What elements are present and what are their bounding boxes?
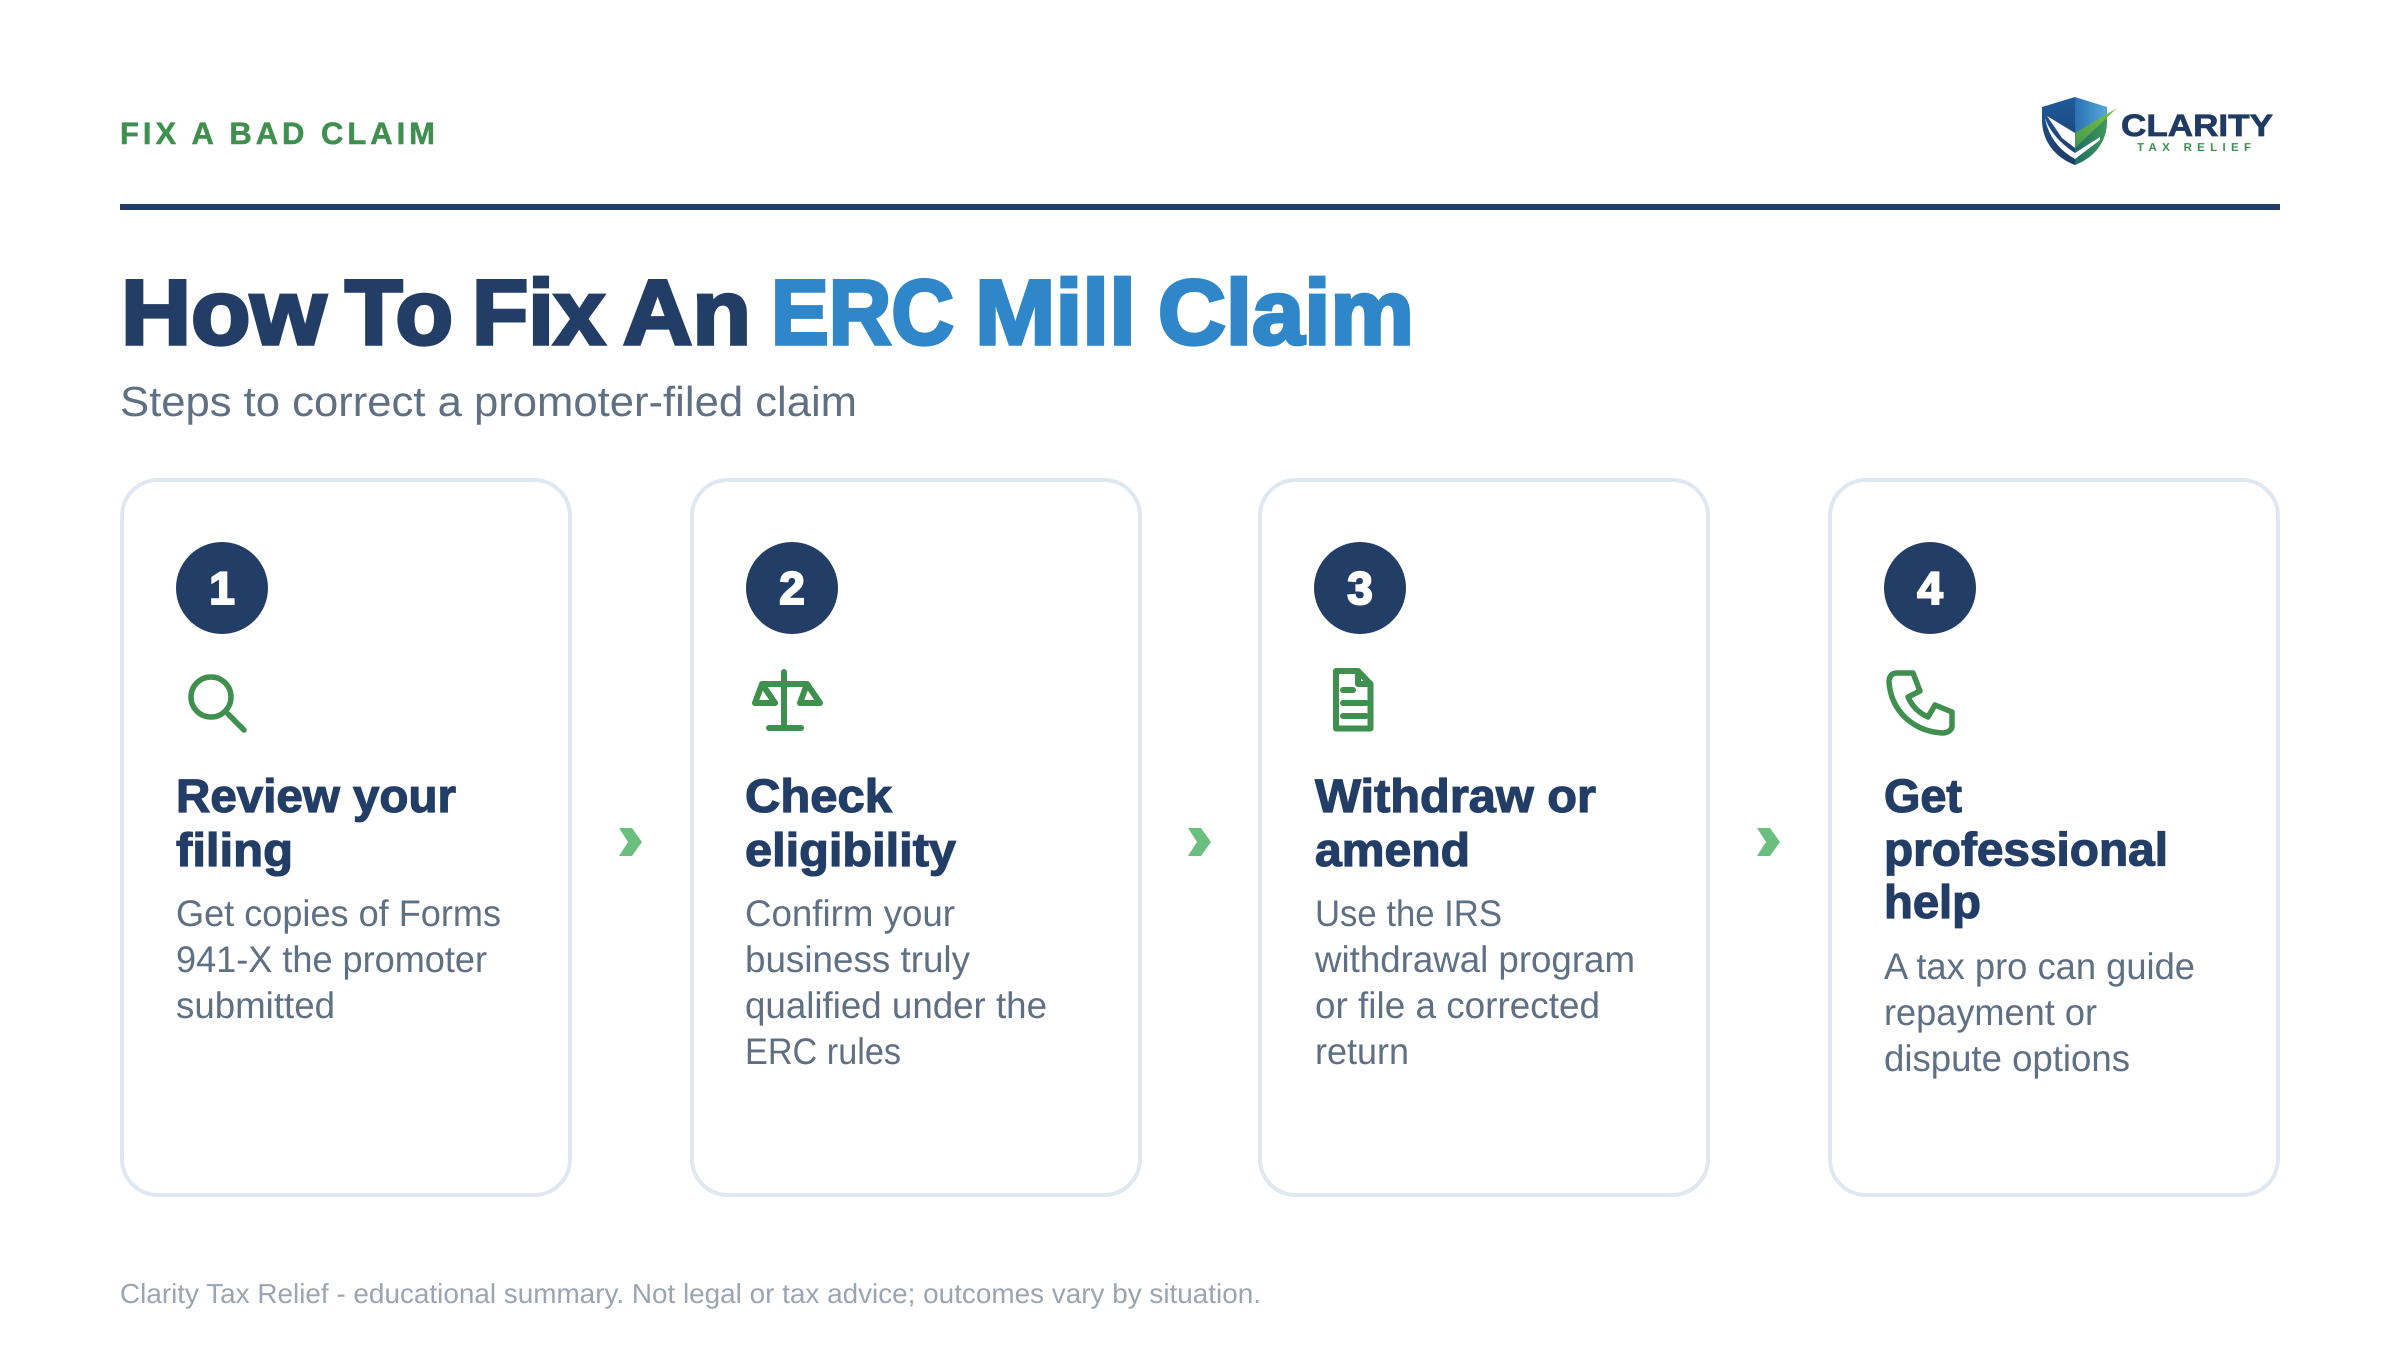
panel: step 4 (1830, 480, 2278, 1195)
step 4 text: A tax pro can guide (1884, 946, 2195, 987)
title: Fix (472, 262, 605, 364)
step number 4 (1884, 542, 1976, 634)
title: To (345, 262, 453, 364)
step 3 text: or file a corrected (1315, 985, 1600, 1026)
step 2 heading: Check (745, 769, 893, 822)
icon: magnifying glass (191, 677, 244, 730)
header rule (120, 204, 2280, 210)
step 2 text: qualified under the (745, 985, 1047, 1026)
step 3 heading: Withdraw or (1315, 769, 1596, 822)
step 3 text: return (1315, 1031, 1409, 1072)
panel: step 1 (122, 480, 570, 1195)
step number 3 (1314, 542, 1406, 634)
step 4 heading: professional (1884, 822, 2168, 876)
step number 2 (746, 542, 838, 634)
step 1 heading: Review your (176, 769, 456, 822)
step 2 text: business truly (745, 939, 970, 980)
step 2 text: ERC rules (745, 1031, 901, 1072)
footer note: Clarity Tax Relief - educational summary. Not legal or tax advice; outcomes vary by situation. (120, 1278, 1261, 1309)
icon: phone (1889, 673, 1952, 733)
step 4 text: dispute options (1884, 1038, 2130, 1079)
step 2 text: Confirm your (745, 893, 955, 934)
step 1 text: Get copies of Forms (176, 893, 501, 934)
subtitle: Steps to correct a promoter-filed claim (120, 378, 857, 425)
step number 2: 2 (779, 562, 805, 614)
step 1 text: submitted (176, 985, 335, 1026)
panel: step 2 (692, 480, 1140, 1195)
step 1 text: 941-X the promoter (176, 939, 487, 980)
title: How (121, 262, 326, 364)
step 3 text: withdrawal program (1314, 939, 1635, 980)
panel: step 3 (1260, 480, 1708, 1195)
logo: Clarity Tax Relief: TAX RELIEF (2137, 142, 2251, 154)
title: An (623, 262, 751, 364)
eyebrow label: FIX A BAD CLAIM (120, 116, 435, 151)
icon: document (1336, 671, 1370, 728)
step number 3: 3 (1347, 562, 1373, 614)
step number 1: 1 (209, 562, 235, 614)
title highlight: Claim (1158, 262, 1414, 364)
step 4 heading: help (1884, 875, 1981, 928)
step number 4: 4 (1917, 562, 1943, 614)
logo: Clarity Tax Relief (2042, 97, 2273, 165)
step 4 text: repayment or (1884, 992, 2097, 1033)
step 2 heading: eligibility (745, 823, 956, 876)
title highlight: ERC (771, 262, 954, 364)
step 3 text: Use the IRS (1315, 893, 1502, 934)
step number 1 (176, 542, 268, 634)
logo: Clarity Tax Relief: CLARITY (2121, 108, 2273, 143)
arrow 1 (619, 828, 642, 856)
step 1 heading: filing (176, 823, 293, 876)
arrow 2 (1188, 828, 1211, 856)
step 4 heading: Get (1884, 769, 1962, 822)
arrow 3 (1757, 828, 1780, 856)
title highlight: Mill (975, 262, 1136, 364)
step 3 heading: amend (1315, 823, 1470, 876)
icon: scales (755, 672, 820, 728)
